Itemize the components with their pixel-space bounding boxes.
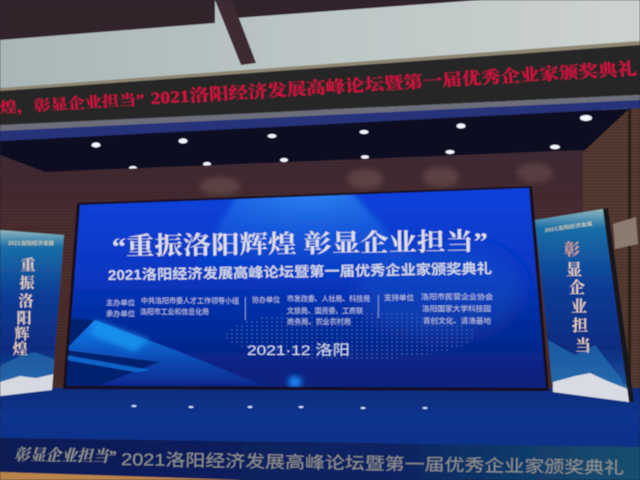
ticker text bbox=[0, 58, 637, 118]
organizer list: 洛阳国家大学科技园 bbox=[422, 304, 491, 313]
skirting text: 2021洛阳经济发展高峰论坛暨第一届优秀企业家颁奖典礼 bbox=[121, 450, 624, 478]
organizer list: 承办单位 bbox=[106, 309, 135, 318]
left banner vertical slogan: 振 bbox=[19, 274, 35, 292]
ledge strip bbox=[171, 157, 433, 177]
organizer list: 中共洛阳市委人才工作领导小组 bbox=[141, 296, 239, 305]
right roll-up banner bbox=[535, 208, 634, 404]
right banner vertical slogan: 业 bbox=[571, 298, 587, 316]
right banner logo text: 2021洛阳经济发展 bbox=[544, 220, 593, 234]
left banner vertical slogan: 辉 bbox=[14, 325, 30, 343]
wood wall behind the stage bbox=[0, 150, 583, 400]
right banner vertical slogan: 当 bbox=[575, 336, 591, 355]
right side wood wall bbox=[583, 108, 640, 400]
LED main screen bbox=[60, 186, 549, 391]
right banner vertical slogan: 担 bbox=[572, 316, 588, 335]
left banner logo text: 2021洛阳经济发展 bbox=[8, 240, 54, 247]
left banner vertical slogan: 煌 bbox=[11, 340, 28, 358]
main title: “重振洛阳辉煌 彰显企业担当” bbox=[112, 228, 488, 261]
organizer list: 主办单位 bbox=[106, 298, 135, 307]
organizer list: 青创文化、清浩基地 bbox=[423, 316, 491, 325]
skirting text: 彰显企业担当” bbox=[14, 446, 116, 466]
organizer list: 协办单位 bbox=[252, 295, 280, 304]
left banner vertical slogan bbox=[11, 256, 36, 358]
ticker text: 煌，彰显企业担当” bbox=[0, 90, 145, 118]
stage floor bbox=[0, 388, 640, 447]
LED ticker banner bbox=[0, 41, 640, 141]
right banner vertical slogan: 彰 bbox=[564, 240, 580, 259]
organizer list: 支持单位 bbox=[384, 293, 414, 302]
left banner vertical slogan: 洛 bbox=[18, 292, 34, 310]
skirting text bbox=[14, 446, 624, 478]
stage skirting banner bbox=[0, 438, 640, 480]
left banner vertical slogan: 重 bbox=[20, 256, 36, 274]
left roll-up banner bbox=[0, 230, 64, 398]
organizer list: 商务局、农业农村局 bbox=[287, 317, 351, 326]
right banner vertical slogan: 企 bbox=[569, 278, 585, 297]
ceiling: light panels and dark beams bbox=[0, 0, 640, 110]
screen artwork: rays, globe dots and light wave bbox=[60, 190, 520, 388]
left banner vertical slogan: 阳 bbox=[16, 310, 32, 327]
organizer list: 洛阳市民营企业协会 bbox=[421, 292, 493, 301]
dark recessed ceiling with spotlights bbox=[0, 108, 640, 200]
ticker text: 2021洛阳经济发展高峰论坛暨第一届优秀企业家颁奖典礼 bbox=[150, 58, 637, 108]
organizer list bbox=[106, 292, 493, 326]
organizer list: 市发改委、人社局、科技局 bbox=[287, 294, 370, 303]
right banner vertical slogan bbox=[564, 240, 591, 355]
date and location: 2021·12 洛阳 bbox=[247, 342, 350, 358]
organizer list: 文旅局、国资委、工商联 bbox=[287, 306, 363, 315]
subtitle: 2021洛阳经济发展高峰论坛暨第一届优秀企业家颁奖典礼 bbox=[108, 260, 492, 283]
right banner vertical slogan: 显 bbox=[566, 261, 582, 279]
organizer list: 洛阳市工业和信息化局 bbox=[140, 307, 209, 316]
